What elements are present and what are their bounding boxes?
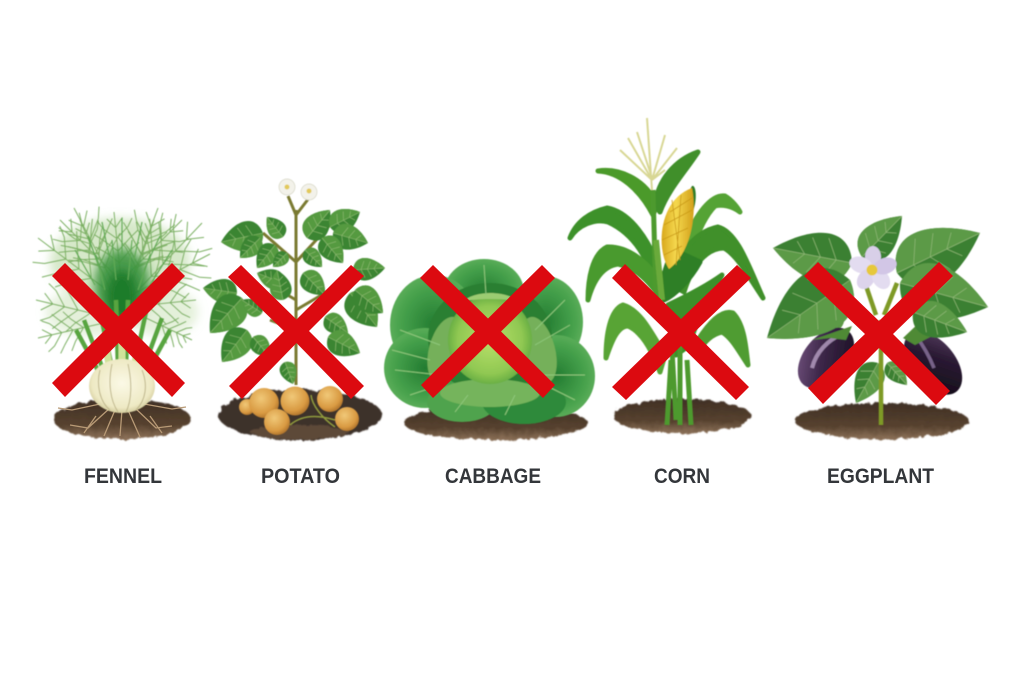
label: fennel: FENNEL (84, 464, 162, 488)
eggplant fruit left (787, 317, 865, 399)
eggplant lower leaves (804, 303, 914, 410)
cross: corn (612, 264, 751, 400)
eggplant plant (749, 204, 995, 425)
potato tubers (239, 386, 359, 435)
cross: cabbage (420, 265, 555, 398)
fennel dense core (94, 249, 150, 321)
fennel stalks (76, 300, 170, 374)
eggplant upper leaves (749, 204, 995, 364)
cross: fennel (52, 263, 185, 397)
eggplant flower (847, 246, 899, 293)
fennel roots (58, 404, 186, 437)
eggplant stem (864, 280, 897, 425)
cabbage inner leaves (421, 283, 563, 407)
cabbage head (384, 259, 595, 424)
corn plant (570, 118, 763, 425)
soil: fennel (53, 399, 191, 439)
potato stem (262, 196, 330, 385)
soil: cabbage (404, 406, 588, 440)
label: potato: POTATO (261, 464, 340, 488)
cabbage heart (448, 296, 532, 384)
panel: eggplant (749, 204, 995, 488)
panel: cabbage (384, 259, 595, 488)
label: corn: CORN (654, 464, 710, 488)
soil: corn (613, 399, 751, 433)
cross: eggplant (804, 262, 953, 405)
cross: potato (228, 265, 364, 399)
label: eggplant: EGGPLANT (827, 464, 934, 488)
corn leaves (570, 152, 763, 372)
corn stalk (653, 190, 691, 425)
fennel bulb (89, 359, 155, 413)
panel: potato (198, 179, 391, 488)
eggplant fruit right (892, 320, 974, 405)
label: cabbage: CABBAGE (445, 464, 541, 488)
corn tassel (620, 118, 677, 190)
panel: fennel (21, 195, 225, 488)
potato leaves (198, 201, 391, 387)
soil: potato (218, 390, 382, 440)
soil: eggplant (795, 403, 969, 439)
panel: corn (570, 118, 763, 488)
corn ear (662, 186, 696, 269)
potato plant (198, 179, 391, 435)
fennel fronds (21, 195, 225, 374)
potato flowers (279, 179, 317, 200)
cabbage outer leaves (384, 259, 595, 424)
